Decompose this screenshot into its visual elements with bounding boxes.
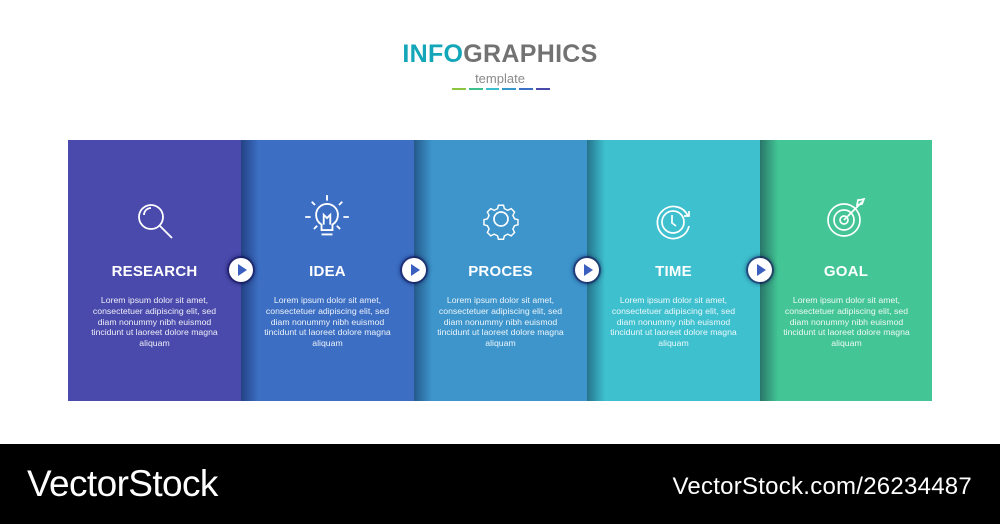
arrow 1 bbox=[229, 258, 253, 282]
panel: idea: Lorem ipsum dolor sit amet, consectetuer adipiscing elit, sed diam nonummy nibh euismod tincidunt ut laoreet dolore magna aliquam bbox=[264, 295, 391, 348]
panel: time bbox=[587, 140, 760, 401]
panel: idea: IDEA bbox=[309, 263, 346, 280]
subtitle: template bbox=[475, 71, 525, 86]
arrow 3 bbox=[575, 258, 599, 282]
icon: magnifier bbox=[138, 204, 173, 239]
panel: research bbox=[68, 140, 241, 401]
panel: time: Lorem ipsum dolor sit amet, consectetuer adipiscing elit, sed diam nonummy nibh euismod tincidunt ut laoreet dolore magna aliquam bbox=[610, 295, 737, 348]
title: INFOGRAPHICS bbox=[402, 40, 598, 68]
panel: proces bbox=[414, 140, 587, 401]
panel: time: TIME bbox=[655, 263, 692, 280]
arrow 4 bbox=[748, 258, 772, 282]
icon: bulb bbox=[305, 195, 349, 236]
footer url: VectorStock.com/26234487 bbox=[672, 473, 972, 500]
icon: gear bbox=[483, 204, 519, 240]
footer bbox=[0, 444, 1000, 524]
panel: idea bbox=[241, 140, 414, 401]
panel: goal bbox=[760, 140, 932, 401]
panel: research: Lorem ipsum dolor sit amet, consectetuer adipiscing elit, sed diam nonummy nibh euismod tincidunt ut laoreet dolore magna aliquam bbox=[91, 295, 218, 348]
panel: research: RESEARCH bbox=[112, 263, 197, 280]
panel: proces: PROCES bbox=[468, 263, 533, 280]
arrow 2 bbox=[402, 258, 426, 282]
panel: goal: GOAL bbox=[824, 263, 868, 280]
icon: clock bbox=[656, 206, 690, 240]
panel: proces: Lorem ipsum dolor sit amet, consectetuer adipiscing elit, sed diam nonummy nibh euismod tincidunt ut laoreet dolore magna aliquam bbox=[437, 295, 564, 348]
footer logo: VectorStock bbox=[27, 463, 218, 504]
panel: goal: Lorem ipsum dolor sit amet, consectetuer adipiscing elit, sed diam nonummy nibh euismod tincidunt ut laoreet dolore magna aliquam bbox=[783, 295, 910, 348]
color dashes bbox=[452, 88, 550, 90]
icon: target bbox=[827, 198, 866, 237]
